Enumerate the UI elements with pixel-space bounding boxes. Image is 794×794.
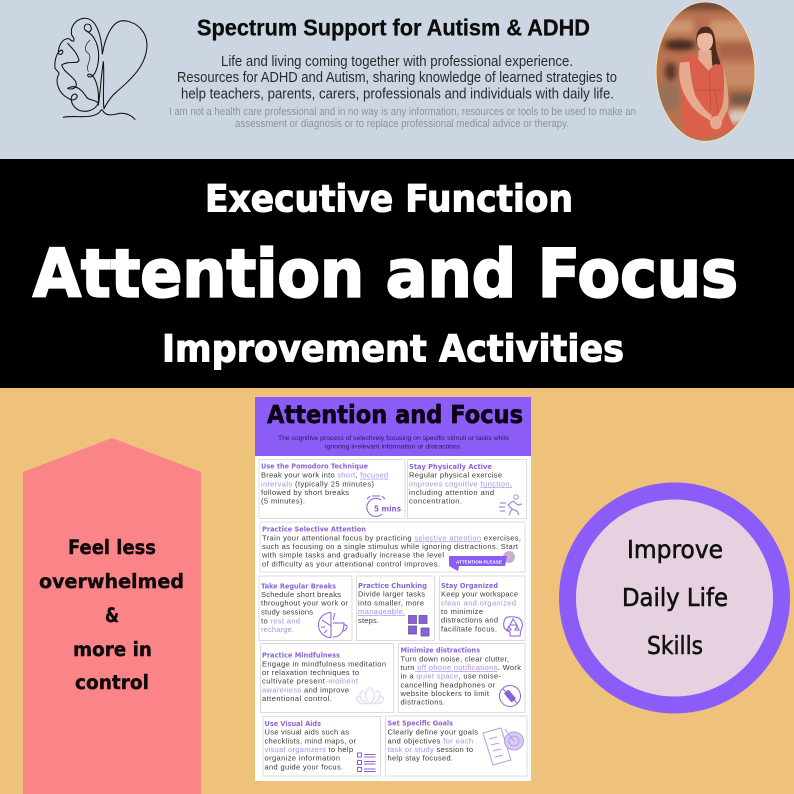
portrait: woman in coral dress [656, 2, 756, 142]
card: Practice Mindfulness: cultivate present-moment [262, 677, 359, 686]
heading: Executive Function: Executive Function [205, 178, 573, 220]
text block: arrow message: overwhelmed [39, 570, 184, 593]
heading: Attention and Focus: Attention and Focus [33, 236, 738, 312]
card: Regular Breaks: study sessions [261, 608, 313, 617]
card: Practice Mindfulness: Practice Mindfulness [262, 652, 340, 660]
card: Minimize distractions: distractions. [400, 698, 445, 707]
panel: attention and focus poster [255, 397, 531, 781]
poster header [255, 397, 531, 456]
text block: arrow message: more in [73, 638, 152, 661]
card: Stay Physically Active: Regular physical exercise [409, 471, 502, 480]
card: Set Specific Goals: Set Specific Goals [388, 720, 453, 728]
card: Use Visual Aids: and guide your focus. [264, 762, 343, 771]
card: Stay Organized: Stay Organized [441, 582, 498, 590]
card: Pomodoro: followed by short breaks [261, 488, 349, 497]
card: Practice Chunking: manageable. [358, 607, 405, 616]
icon: checklist [358, 753, 376, 772]
card: Set Specific Goals: and objectives for each [388, 736, 473, 745]
icon: no-phone sign [500, 686, 520, 706]
card: Use Visual Aids [263, 716, 380, 776]
icon: running figure [499, 495, 522, 515]
card: Regular Breaks: to rest and [261, 616, 300, 625]
card: Pomodoro: Break your work into short, focused [261, 471, 388, 480]
icon: lotus [357, 687, 383, 704]
card: Practice Chunking: Divide larger tasks [358, 590, 425, 599]
card: Practice Mindfulness: attentional control. [262, 694, 332, 703]
icon: attention please badge [449, 551, 515, 571]
card: Practice Chunking: steps. [358, 616, 379, 625]
poster header: ignoring irrelevant information or distractions. [325, 444, 462, 450]
card: Pomodoro: Use the Pomodoro Technique [261, 463, 368, 471]
poster header: Attention and Focus [267, 400, 523, 429]
card: Stay Organized: clean and organized [441, 598, 516, 607]
card: Practice Mindfulness: Engage in mindfulness meditation [262, 659, 386, 668]
text block: disclaimer: I am not a health care professional and in no way is any information, resources or tools to be used to make an [169, 106, 636, 118]
card: Minimize distractions: turn off phone notifications. Work [400, 663, 521, 672]
black title band [0, 159, 794, 388]
card: Stay Organized: Keep your workspace [441, 590, 518, 599]
card: Pomodoro: intervals (typically 25 minutes) [261, 479, 374, 488]
card: Use Visual Aids: checklists, mind maps, or [264, 736, 356, 745]
text block: circle message: Improve [627, 535, 723, 564]
card: Stay Physically Active: Stay Physically Active [409, 463, 492, 471]
card: Set Specific Goals: help stay focused. [388, 754, 453, 763]
card: Practice Chunking: into smaller, more [358, 598, 424, 607]
card: Minimize distractions: in a quiet space, use noise- [400, 672, 502, 681]
card: Practice Mindfulness: awareness and improve [262, 685, 349, 694]
card: Selective Attention [260, 522, 525, 572]
text block: disclaimer [169, 106, 636, 130]
card: Minimize distractions: website blockers to limit [400, 689, 490, 698]
card: Selective Attention: Practice Selective Attention [262, 525, 366, 533]
text block: circle message [622, 535, 728, 660]
card: Minimize distractions: Turn down noise, clear clutter, [400, 654, 509, 663]
card: Selective Attention: Train your attentional focus by practicing selective attention exercises, [262, 533, 521, 542]
text block: arrow message [39, 536, 184, 694]
card: Selective Attention: such as focusing on a single stimulus while ignoring distractions. Start [262, 542, 519, 551]
icon: stopwatch [367, 496, 401, 516]
text block: arrow message: & [105, 604, 119, 627]
card: Practice Mindfulness: or relaxation techniques to [262, 668, 359, 677]
arrow panel: feel less overwhelmed [23, 438, 201, 794]
text block: introduction: Resources for ADHD and Autism, sharing knowledge of learned strategies to [177, 69, 617, 86]
text block: introduction [177, 53, 617, 102]
card: Regular Breaks: throughout your work or [261, 599, 348, 608]
card: Stay Physically Active: improves cognitive function, [409, 479, 512, 488]
text block: circle message: Skills [647, 631, 703, 660]
card: Pomodoro: (5 minutes). [261, 497, 305, 506]
icon: clock and cup [318, 612, 347, 638]
card: Practice Chunking: Practice Chunking [358, 582, 427, 590]
card: Minimize distractions [398, 644, 525, 712]
heading: Improvement Activities: Improvement Activities [162, 328, 624, 370]
poster header: The cognitive process of selectively focusing on specific stimuli or tasks while [278, 435, 510, 442]
card: Stay Organized: facilitate focus. [441, 624, 497, 633]
card: Practice Chunking [356, 576, 434, 640]
icon: head with figures [504, 617, 522, 636]
card: Pomodoro [259, 460, 405, 518]
card: Selective Attention: with simple tasks and gradually increase the level [261, 551, 444, 560]
card: Stay Organized [440, 576, 525, 640]
icon: attention please badge: ATTENTION PLEASE [456, 560, 502, 564]
card: Use Visual Aids: Use Visual Aids [264, 720, 321, 728]
text block: circle message: Daily Life [622, 583, 728, 612]
icon: chunk squares [408, 616, 429, 636]
heading: Spectrum Support: Spectrum Support for Autism & ADHD [197, 14, 590, 40]
card: Use Visual Aids: Use visual aids such as [264, 728, 349, 737]
card: Minimize distractions: Minimize distractions [400, 647, 480, 655]
card: Stay Physically Active: including attention and [409, 488, 494, 497]
icon: clipboard and target [483, 728, 524, 765]
card: Use Visual Aids: visual organizers to help [264, 745, 353, 754]
card: Set Specific Goals [386, 716, 527, 776]
card: Regular Breaks: Schedule short breaks [261, 590, 341, 599]
card: Set Specific Goals: Clearly define your goals [388, 728, 478, 737]
card: Selective Attention: of difficulty as your attentional control improves. [262, 559, 440, 568]
text block: introduction: help teachers, parents, carers, professionals and individuals with daily life. [181, 86, 614, 102]
card: Stay Physically Active [408, 460, 526, 518]
text block: disclaimer: assessment or diagnosis or to replace professional medical advice or therapy. [235, 118, 569, 130]
card: Stay Organized: distractions and [441, 616, 498, 625]
card: Regular Breaks: Take Regular Breaks [261, 582, 336, 590]
icon: brain and heart line art [55, 18, 147, 119]
text block: arrow message: Feel less [68, 536, 156, 559]
text block: introduction: Life and living coming together with professional experience. [221, 53, 573, 70]
card: Regular Breaks: recharge. [261, 625, 294, 634]
card: Stay Organized: to minimize [441, 607, 483, 616]
card: Stay Physically Active: concentration. [409, 497, 462, 506]
card: Regular Breaks [259, 576, 352, 640]
card: Minimize distractions: cancelling headphones or [400, 680, 496, 689]
card: Use Visual Aids: organize information [264, 754, 340, 763]
text block: arrow message: control [75, 671, 149, 694]
header panel [0, 0, 794, 160]
icon: stopwatch: 5 mins [374, 504, 401, 514]
circle panel: improve daily life skills [559, 482, 790, 714]
card: Set Specific Goals: task or study session to [388, 745, 473, 754]
card: Practice Mindfulness [260, 644, 394, 712]
